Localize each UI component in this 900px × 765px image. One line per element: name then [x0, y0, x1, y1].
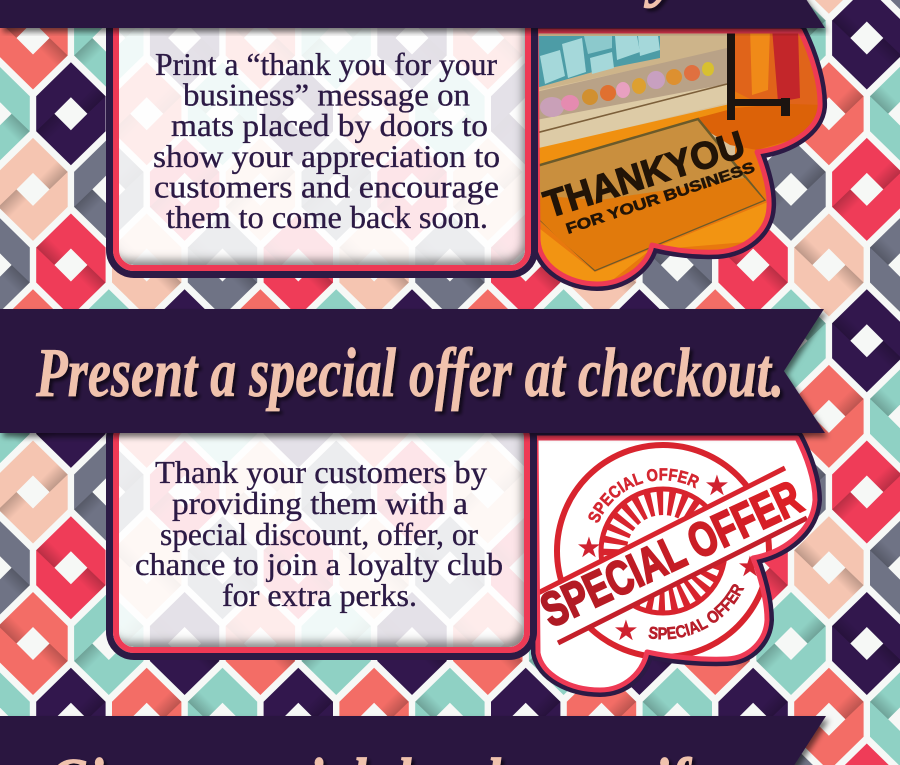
text block: thank you mats — [153, 46, 500, 235]
stamp stars: ★ — [706, 472, 729, 500]
doormat subtext: FOR YOUR BUSINESS — [564, 159, 757, 238]
text block: special offer: chance to join a loyalty club — [135, 546, 503, 582]
stamp stars: ★ — [578, 534, 601, 562]
panel: special offer — [106, 410, 537, 660]
image: special offer stamp — [530, 433, 822, 697]
text block: thank you mats: business” message on — [183, 77, 470, 113]
text block: thank you mats: them to come back soon. — [166, 199, 488, 235]
text block: special offer: for extra perks. — [222, 577, 417, 613]
text block: special offer — [135, 454, 503, 613]
text block: thank you mats: customers and encourage — [154, 168, 499, 204]
text block: thank you mats: show your appreciation to — [153, 138, 500, 174]
stamp band — [560, 488, 770, 627]
stamp ring text top: SPECIAL OFFER — [588, 468, 699, 523]
stamp ring text bottom: SPECIAL OFFER — [648, 584, 744, 640]
panel: thank you mats — [106, 0, 538, 278]
text block: special offer: special discount, offer, or — [160, 516, 478, 552]
text block: special offer: providing them with a — [172, 485, 468, 521]
stamp band text: SPECIAL OFFER — [533, 471, 810, 638]
banner: bottom — [0, 716, 826, 765]
stamp stars: ★ — [615, 617, 638, 645]
text block: thank you mats: Print a “thank you for your — [155, 46, 497, 82]
text block: thank you mats: mats placed by doors to — [171, 107, 488, 143]
stamp rings — [557, 445, 769, 657]
stamp stars — [578, 472, 762, 645]
doormat text: THANKYOU — [539, 124, 750, 227]
text block: special offer: Thank your customers by — [155, 454, 487, 490]
image: thank you doormat in shop — [530, 28, 825, 290]
banner: present a special offer — [0, 309, 825, 433]
stamp stars: ★ — [739, 553, 762, 581]
banner: top — [0, 0, 825, 28]
